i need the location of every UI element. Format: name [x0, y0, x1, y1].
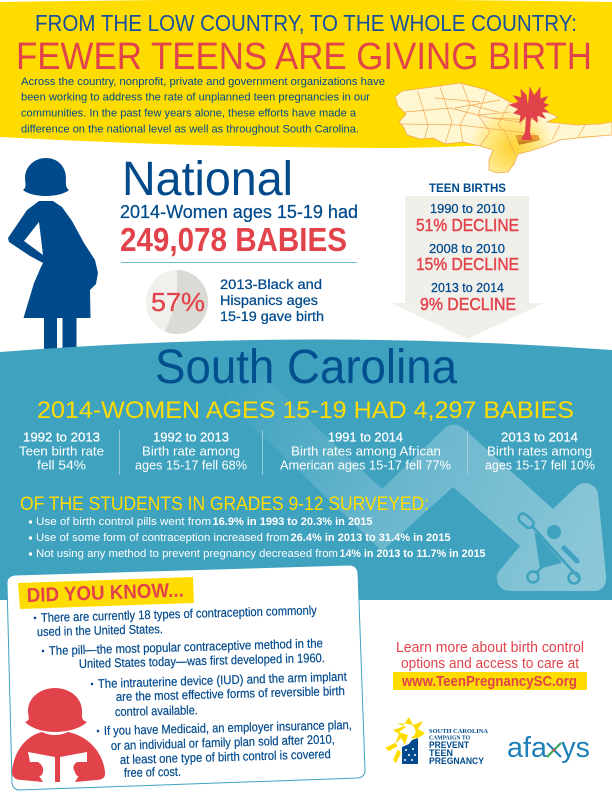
- fact: medicaid: at least one type of birth control is covered: [120, 747, 331, 767]
- website url bar: www.TeenPregnancySC.org: [401, 674, 577, 690]
- heading: national: National: [122, 153, 293, 206]
- header yellow band: [0, 0, 612, 148]
- fact: the pill: United States today—was first developed in 1960.: [79, 651, 325, 671]
- pie chart 57 percent: 57%: [151, 287, 205, 317]
- teen births decline arrow: [391, 196, 544, 339]
- fact: medicaid: or an individual or family plan sold after 2010,: [111, 732, 335, 753]
- stat column 3: Birth rates among African: [291, 444, 441, 459]
- logo: south carolina campaign: TEEN: [429, 748, 453, 758]
- fact: medicaid: [97, 718, 352, 780]
- stat column 2: 1992 to 2013: [153, 430, 229, 445]
- south carolina subhead: 2014-WOMEN AGES 15-19 HAD 4,297 BABIES: [37, 397, 574, 424]
- pie caption: 2013-Black and: [220, 277, 322, 292]
- stat column 4: [485, 430, 595, 472]
- pregnant woman silhouette: [8, 158, 98, 354]
- did you know banner: DID YOU KNOW...: [26, 580, 184, 607]
- survey bullet list: 14% in 2013 to 11.7% in 2015: [340, 548, 486, 560]
- heading: south carolina: South Carolina: [155, 341, 457, 394]
- stat column 1: 1992 to 2013: [23, 430, 100, 445]
- pie chart 57 percent: [146, 270, 208, 334]
- pie caption: Hispanics ages: [220, 293, 318, 308]
- fact: IUD and implant: control available.: [115, 703, 198, 719]
- survey bullet list: Use of birth control pills went from: [36, 516, 211, 528]
- map of the United States with palm tree: [395, 83, 612, 173]
- call to action text: options and access to care at: [401, 655, 580, 672]
- icon: stroller: [517, 512, 580, 584]
- logo: south carolina campaign: [385, 717, 489, 766]
- teen births decline arrow: 9% DECLINE: [420, 294, 516, 314]
- logo: afaxys: afaxys: [507, 732, 590, 764]
- stat column 3: American ages 15-17 fell 77%: [280, 457, 451, 472]
- panel: south carolina teal band: [0, 339, 612, 600]
- stat column 3: [280, 430, 451, 472]
- logo: south carolina campaign: PREVENT: [429, 740, 469, 750]
- stat column 3: 1991 to 2014: [328, 430, 403, 445]
- intro paragraph: difference on the national level as well as throughout South Carolina.: [21, 124, 359, 136]
- intro paragraph: [21, 76, 385, 136]
- logo icon: sun and tower: [385, 717, 425, 764]
- fact: IUD and implant: are the most effective forms of reversible birth: [116, 684, 345, 704]
- panel: did you know card: [7, 565, 365, 790]
- pie caption: 15-19 gave birth: [220, 309, 324, 324]
- national big number: 249,078 BABIES: [120, 221, 347, 258]
- survey bullet list: Not using any method to prevent pregnancy decreased from: [36, 548, 338, 560]
- stat column 4: ages 15-17 fell 10%: [485, 457, 595, 472]
- stat column 4: Birth rates among: [487, 444, 592, 459]
- survey bullet list: 16.9% in 1993 to 20.3% in 2015: [212, 516, 372, 528]
- national subhead: 2014-Women ages 15-19 had: [120, 201, 358, 222]
- fact: IUD and implant: [91, 670, 347, 719]
- fact: the pill: [42, 636, 325, 671]
- stat column 1: Teen birth rate: [19, 444, 104, 459]
- logo: south carolina campaign: SOUTH CAROLINA: [429, 729, 489, 735]
- logo: south carolina campaign: CAMPAIGN TO: [429, 736, 470, 742]
- stat column 1: [19, 430, 104, 472]
- stat column 2: [135, 430, 247, 472]
- stat column 2: ages 15-17 fell 68%: [135, 457, 247, 472]
- fact: 18 types: [34, 603, 318, 639]
- logo: south carolina campaign: PREGNANCY: [429, 756, 484, 766]
- call to action text: [396, 639, 584, 672]
- palm base: [516, 135, 540, 145]
- stat column 4: 2013 to 2014: [501, 430, 578, 445]
- teen births decline arrow: 2013 to 2014: [431, 281, 504, 295]
- teen births decline arrow: 2008 to 2010: [429, 242, 505, 256]
- intro paragraph: been working to address the rate of unplanned teen pregnancies in our: [21, 92, 370, 104]
- fact: IUD and implant: The intrauterine device (IUD) and the arm implant: [98, 670, 347, 691]
- teen births decline arrow: 15% DECLINE: [416, 254, 519, 274]
- students surveyed heading: OF THE STUDENTS IN GRADES 9-12 SURVEYED:: [20, 493, 429, 515]
- intro paragraph: communities. In the past few years alone, these efforts have made a: [21, 108, 357, 120]
- fact: the pill: The pill—the most popular contraceptive method in the: [49, 636, 323, 658]
- fact: medicaid: If you have Medicaid, an employer insurance plan,: [104, 718, 352, 738]
- survey bullet list: [29, 516, 486, 560]
- survey bullet list: Use of some form of contraception increased from: [36, 532, 289, 544]
- downward trend arrow with stroller: [225, 370, 606, 591]
- fact: 18 types: used in the United States.: [37, 622, 163, 639]
- teen births heading: TEEN BIRTHS: [429, 183, 506, 195]
- stat column 2: Birth rate among: [142, 444, 240, 459]
- pie caption: [220, 277, 324, 324]
- teen births decline arrow: 1990 to 2010: [430, 202, 505, 216]
- intro paragraph: Across the country, nonprofit, private and government organizations have: [21, 76, 385, 88]
- teen births decline arrow: 51% DECLINE: [416, 215, 519, 235]
- icon: person reading: [12, 688, 105, 782]
- fact: 18 types: There are currently 18 types of contraception commonly: [41, 603, 318, 625]
- fact: medicaid: free of cost.: [124, 765, 181, 780]
- stat column 1: fell 54%: [37, 457, 86, 472]
- survey bullet list: 26.4% in 2013 to 31.4% in 2015: [290, 532, 450, 544]
- call to action text: Learn more about birth control: [396, 639, 584, 656]
